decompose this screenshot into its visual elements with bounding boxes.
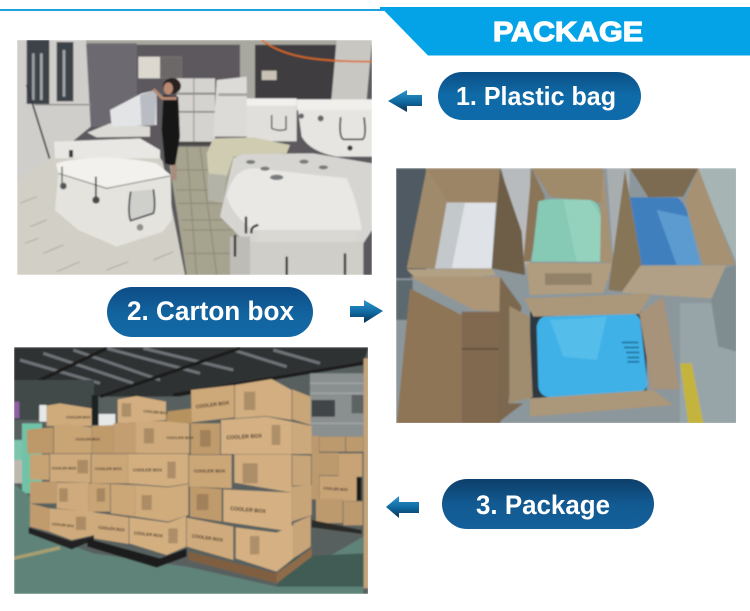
carton printing: COOLER BOX [95,466,122,471]
carton printing: COOLER BOX [226,433,263,441]
arrow: pointing left to photo 3 [386,496,419,518]
floor [167,147,240,275]
photo: coolers being wrapped in plastic bags [17,40,372,275]
front cooler on table [56,157,171,188]
carton printing: COOLER BOX [192,533,224,543]
pill label: 1. Plastic bag: 1. Plastic bag [456,81,616,111]
carton printing: COOLER BOX [167,435,194,440]
arrow: pointing left to photo 1 [388,90,422,112]
title: PACKAGE [493,16,643,47]
carton printing: COOLER BOX [143,409,169,416]
pill label: 2. Carton box: 2. Carton box [127,296,294,326]
carton printing: COOLER BOX [66,416,91,420]
carton printing: COOLER BOX [52,466,77,470]
right stack [187,379,312,572]
carton printing: COOLER BOX [98,525,125,532]
pill label: 3. Package [442,479,654,529]
person [163,78,181,94]
table [17,145,185,275]
title banner [380,7,750,56]
box 2 green [523,168,613,295]
pill label: 1. Plastic bag [438,72,641,120]
carton printing: COOLER BOX [75,438,100,442]
carton printing: COOLER BOX [133,467,162,472]
pill label: 3. Package: 3. Package [476,490,610,520]
carton printing: COOLER BOX [134,530,163,538]
floor [14,484,363,594]
carton printing: COOLER BOX [196,400,230,410]
front right cooler [297,109,372,158]
carton printing: COOLER BOX [52,522,75,528]
photo: opened carton boxes with coolers [396,168,737,423]
carton printing: COOLER BOX [230,506,266,515]
empty box [397,277,523,423]
box 3 blue [608,168,735,298]
far stacked coolers [177,78,215,143]
pill label: 2. Carton box [107,287,313,337]
cream wrapped cooler [207,137,290,177]
carton spec text [59,392,280,554]
photo: palletised COOLER BOX cartons in warehouse [14,347,368,594]
carton printing: COOLER BOX [194,469,226,474]
wrapped coolers right [220,153,372,243]
box 1 white [407,168,525,283]
header rule [0,9,384,11]
middle stack [89,396,192,555]
left stack [27,403,94,540]
background pallet stack [312,436,363,525]
box 4 bright blue [509,293,679,417]
carton printing [52,400,349,543]
arrow: pointing right to photo 2 [350,300,383,323]
carton printing: COOLER BOX [323,486,349,492]
